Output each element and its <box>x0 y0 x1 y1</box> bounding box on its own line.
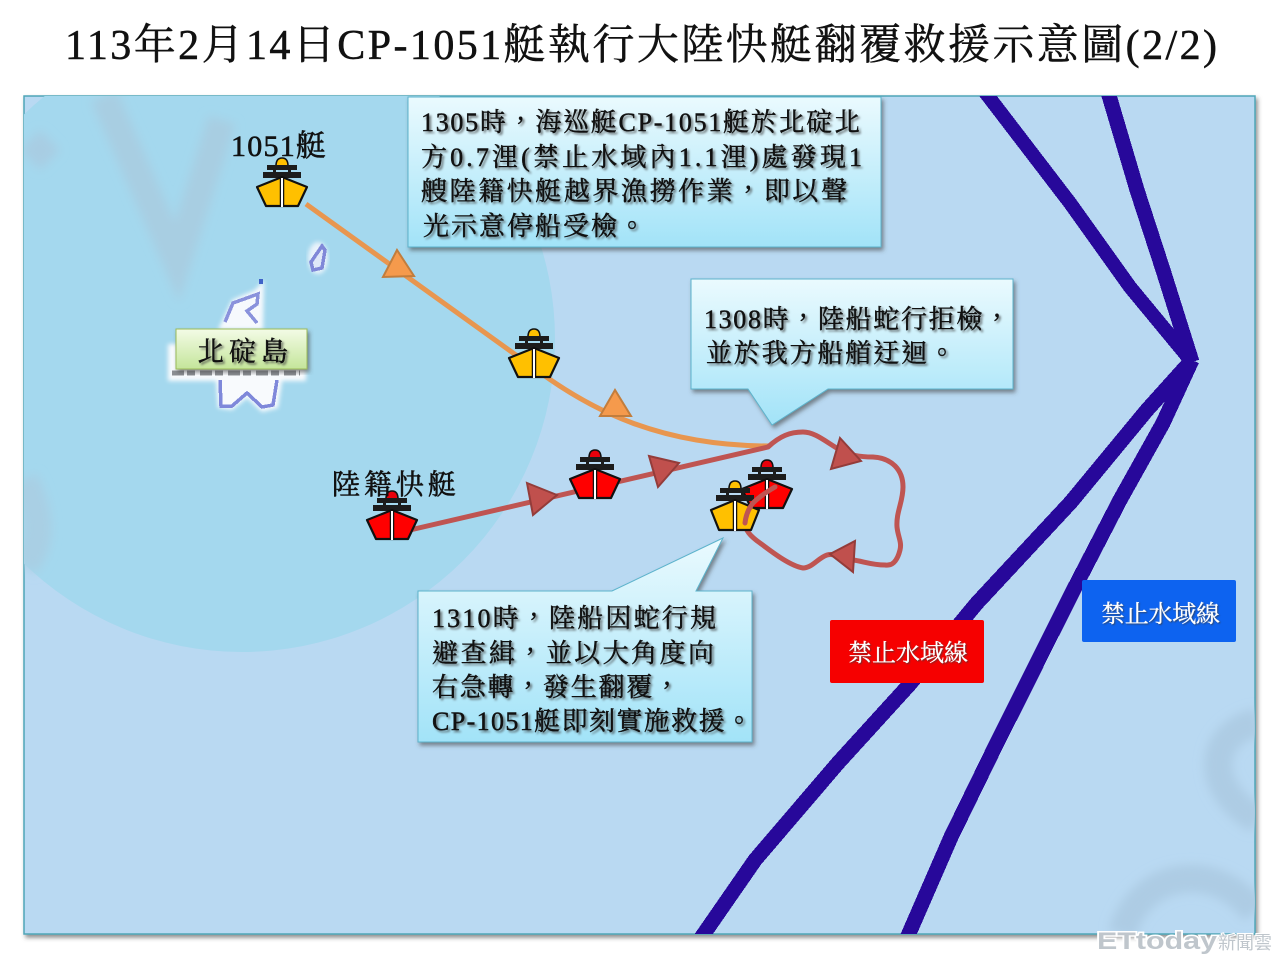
icon: mainland boat capsize point <box>742 460 792 509</box>
callout: 1308 <box>691 279 1013 425</box>
callout: 1308: 1308時，陸船蛇行拒檢， <box>704 305 1010 334</box>
route: CP-1051 orange track <box>306 204 770 446</box>
label: 北碇島 <box>176 329 307 369</box>
icon: patrol boat rescue point <box>711 481 759 531</box>
logo: ETtoday watermark: ETtoday <box>1097 928 1218 955</box>
label: red boundary tag: 禁止水域線 <box>848 640 968 667</box>
icon: mainland boat start <box>367 491 417 540</box>
callout: 1310: 避查緝，並以大角度向 <box>432 639 714 668</box>
label: 陸籍快艇: 陸籍快艇 <box>332 469 456 501</box>
callout: 1305: 方0.7浬(禁止水域內1.1浬)處發現1 <box>421 143 862 172</box>
island: small islet <box>308 242 328 274</box>
label: 北碇島: 北碇島 <box>197 337 288 367</box>
title: 113年2月14日CP-1051艇執行大陸快艇翻覆救援示意圖(2/2) <box>65 22 1217 69</box>
shallow water zone <box>24 96 555 652</box>
island: 北碇島 <box>168 279 306 412</box>
callout: 1305 <box>408 97 881 247</box>
callout: 1310: CP-1051艇即刻實施救援。 <box>432 707 752 736</box>
icon: patrol boat start <box>257 158 307 207</box>
label: blue boundary tag <box>1082 580 1236 642</box>
logo: ETtoday watermark <box>1097 928 1272 955</box>
callout: 1308: 並於我方船艏迂迴。 <box>706 339 955 368</box>
route: mainland boat red track <box>410 432 903 572</box>
callout: 1310: 1310時，陸船因蛇行規 <box>432 604 716 633</box>
callout: 1310 <box>418 538 752 742</box>
logo: ETtoday watermark: 新聞雲 <box>1218 933 1272 953</box>
route overlay on boats <box>745 487 775 523</box>
callout: 1310: 右急轉，發生翻覆， <box>432 673 680 702</box>
callout: 1305: 1305時，海巡艇CP-1051艇於北碇北 <box>421 108 860 137</box>
callout: 1305: 光示意停船受檢。 <box>423 212 645 241</box>
forbidden water boundary lines <box>701 92 1192 938</box>
label: red boundary tag <box>830 620 984 683</box>
label: 1051艇: 1051艇 <box>231 130 326 163</box>
icon: patrol boat en route <box>509 329 559 378</box>
label: blue boundary tag: 禁止水域線 <box>1101 601 1220 628</box>
icon: mainland boat en route <box>570 450 620 499</box>
callout: 1305: 艘陸籍快艇越界漁撈作業，即以聲 <box>421 177 847 206</box>
